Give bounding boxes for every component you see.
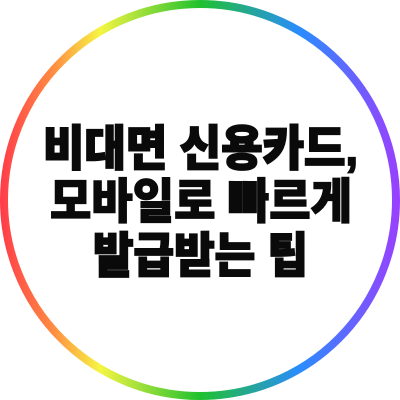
title xyxy=(43,123,358,283)
title line 2: 모바일로 빠르게 xyxy=(50,176,352,229)
title line 1: 비대면 신용카드, xyxy=(43,123,358,176)
title line 3: 발급받는 팁 xyxy=(93,230,308,283)
